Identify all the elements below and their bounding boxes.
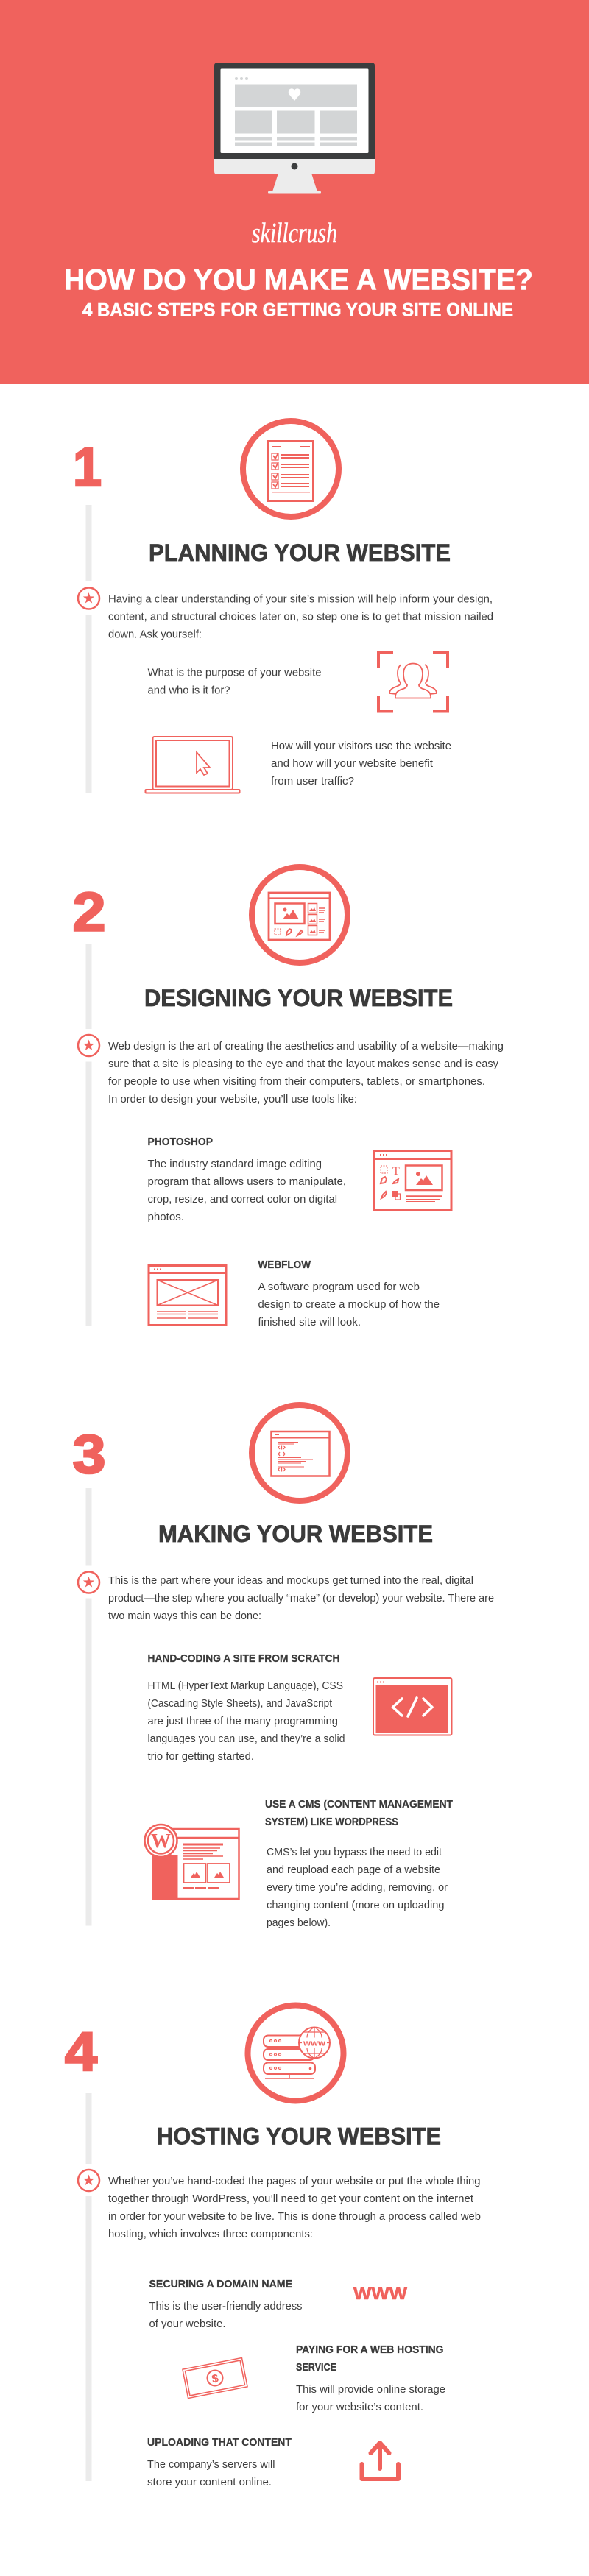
intro text: for people to use when visiting from their computers, tablets, or smartphones. xyxy=(108,1076,485,1088)
icon: upload arrow xyxy=(362,2443,398,2479)
icon: server and globe in circle: www xyxy=(303,2039,326,2048)
step number 3: 3 xyxy=(72,1423,106,1485)
upload text: The company’s servers will xyxy=(147,2459,275,2471)
question 1: and who is it for? xyxy=(147,684,230,696)
icon: design layout in circle xyxy=(252,867,348,963)
webflow text: finished site will look. xyxy=(258,1317,361,1328)
hand-coding text: HAND-CODING A SITE FROM SCRATCH xyxy=(147,1653,340,1665)
subtitle: 4 BASIC STEPS FOR GETTING YOUR SITE ONLINE xyxy=(82,300,513,321)
intro text xyxy=(108,2176,481,2240)
intro text: In order to design your website, you’ll use tools like: xyxy=(108,1094,357,1105)
title: HOW DO YOU MAKE A WEBSITE? xyxy=(64,263,533,296)
icon: star badge xyxy=(78,1035,99,1056)
photoshop text: crop, resize, and correct color on digital xyxy=(147,1194,337,1206)
step number 1: 1 xyxy=(73,436,102,498)
step 1 panel: planning xyxy=(73,421,493,793)
domain text: SECURING A DOMAIN NAME xyxy=(149,2279,292,2290)
timeline bar xyxy=(85,2093,91,2481)
icon: photoshop window: T xyxy=(392,1165,400,1178)
intro text: Web design is the art of creating the aesthetics and usability of a website—making xyxy=(108,1041,504,1052)
photoshop text: The industry standard image editing xyxy=(147,1158,322,1170)
hosting service text xyxy=(296,2344,445,2413)
icon: wordpress window: W xyxy=(151,1830,171,1852)
intro text: This is the part where your ideas and mockups get turned into the real, digital xyxy=(108,1575,473,1587)
icon: star badge xyxy=(78,587,99,609)
hand-coding text: (Cascading Style Sheets), and JavaScript xyxy=(147,1698,332,1710)
heading: DESIGNING YOUR WEBSITE xyxy=(144,985,453,1011)
domain text: of your website. xyxy=(149,2318,225,2330)
icon: people in focus frame xyxy=(378,653,448,711)
logo: skillcrush: skillcrush xyxy=(252,218,337,249)
step number 2: 2 xyxy=(72,882,106,942)
webflow text: WEBFLOW xyxy=(258,1259,311,1271)
icon: photoshop window xyxy=(374,1151,451,1210)
cms text: and reupload each page of a website xyxy=(267,1864,440,1876)
intro text: content, and structural choices later on, so step one is to get that mission nailed xyxy=(108,611,493,623)
cms text: USE A CMS (CONTENT MANAGEMENT xyxy=(265,1799,453,1811)
photoshop text: program that allows users to manipulate, xyxy=(147,1176,346,1188)
question 2: and how will your website benefit xyxy=(271,758,433,770)
intro text: together through WordPress, you’ll need to get your content on the internet xyxy=(108,2193,473,2205)
timeline bar xyxy=(85,505,91,793)
photoshop text: PHOTOSHOP xyxy=(147,1136,213,1148)
step 2 panel: designing xyxy=(72,867,504,1328)
webflow text xyxy=(258,1259,440,1328)
timeline bar xyxy=(85,944,91,1326)
icon: wordpress window xyxy=(144,1825,239,1900)
photoshop text xyxy=(147,1136,346,1223)
intro text: Having a clear understanding of your site’s mission will help inform your design, xyxy=(108,593,493,605)
header panel xyxy=(0,0,589,384)
cms text: every time you’re adding, removing, or xyxy=(267,1882,448,1894)
icon: laptop with cursor xyxy=(146,737,240,793)
hosting service text: for your website’s content. xyxy=(296,2402,423,2413)
timeline bar xyxy=(85,1488,91,1925)
question 2: How will your visitors use the website xyxy=(271,740,451,752)
question 1 xyxy=(147,667,321,696)
icon: code window in circle xyxy=(252,1405,348,1501)
cms text: CMS’s let you bypass the need to edit xyxy=(267,1847,442,1858)
intro text: sure that a site is pleasing to the eye and that the layout makes sense and is easy xyxy=(108,1058,499,1070)
intro text: down. Ask yourself: xyxy=(108,629,202,640)
photoshop text: photos. xyxy=(147,1211,184,1223)
icon: dollar bill: $ xyxy=(211,2372,219,2386)
icon: checklist in circle xyxy=(243,421,339,517)
step 3 panel: making xyxy=(72,1405,494,1929)
icon: star badge xyxy=(78,2170,99,2191)
step number 4: 4 xyxy=(65,2021,97,2082)
hand-coding text: languages you can use, and they’re a solid xyxy=(147,1733,345,1745)
question 2 xyxy=(271,740,451,788)
icon: dollar bill xyxy=(183,2358,247,2398)
hand-coding text xyxy=(147,1653,345,1763)
intro text: two main ways this can be done: xyxy=(108,1610,261,1622)
hosting service text: This will provide online storage xyxy=(296,2384,445,2396)
question 1: What is the purpose of your website xyxy=(147,667,321,679)
question 2: from user traffic? xyxy=(271,776,354,788)
cms text: pages below). xyxy=(267,1917,331,1929)
intro text xyxy=(108,1041,504,1105)
domain text: This is the user-friendly address xyxy=(149,2301,302,2313)
step 4 panel: hosting xyxy=(65,2005,481,2488)
hand-coding text: are just three of the many programming xyxy=(147,1716,338,1727)
upload text: store your content online. xyxy=(147,2477,272,2488)
heading: PLANNING YOUR WEBSITE xyxy=(149,539,451,566)
upload text xyxy=(147,2437,292,2488)
icon: star badge xyxy=(78,1572,99,1593)
hosting service text: PAYING FOR A WEB HOSTING xyxy=(296,2344,443,2356)
intro text: in order for your website to be live. This is done through a process called web xyxy=(108,2211,481,2223)
icon: desktop monitor xyxy=(214,63,375,193)
cms text: changing content (more on uploading xyxy=(267,1900,445,1911)
cms text xyxy=(265,1799,453,1929)
hand-coding text: trio for getting started. xyxy=(147,1751,254,1763)
intro text: Whether you’ve hand-coded the pages of your website or put the whole thing xyxy=(108,2176,480,2187)
icon: code window xyxy=(373,1678,452,1735)
icon: www: WWW xyxy=(353,2284,407,2303)
intro text: product—the step where you actually “make” (or develop) your website. There are xyxy=(108,1593,494,1604)
webflow text: design to create a mockup of how the xyxy=(258,1299,440,1311)
intro text xyxy=(108,1575,494,1622)
heading: HOSTING YOUR WEBSITE xyxy=(157,2123,441,2149)
domain text xyxy=(149,2279,302,2330)
webflow text: A software program used for web xyxy=(258,1281,420,1293)
hosting service text: SERVICE xyxy=(296,2362,336,2374)
intro text: hosting, which involves three components: xyxy=(108,2229,313,2240)
icon: server and globe in circle xyxy=(247,2005,343,2101)
heading: MAKING YOUR WEBSITE xyxy=(158,1521,433,1547)
cms text: SYSTEM) LIKE WORDPRESS xyxy=(265,1816,398,1828)
upload text: UPLOADING THAT CONTENT xyxy=(147,2437,292,2449)
hand-coding text: HTML (HyperText Markup Language), CSS xyxy=(147,1680,343,1692)
icon: wireframe window xyxy=(149,1266,226,1325)
intro text xyxy=(108,593,493,640)
